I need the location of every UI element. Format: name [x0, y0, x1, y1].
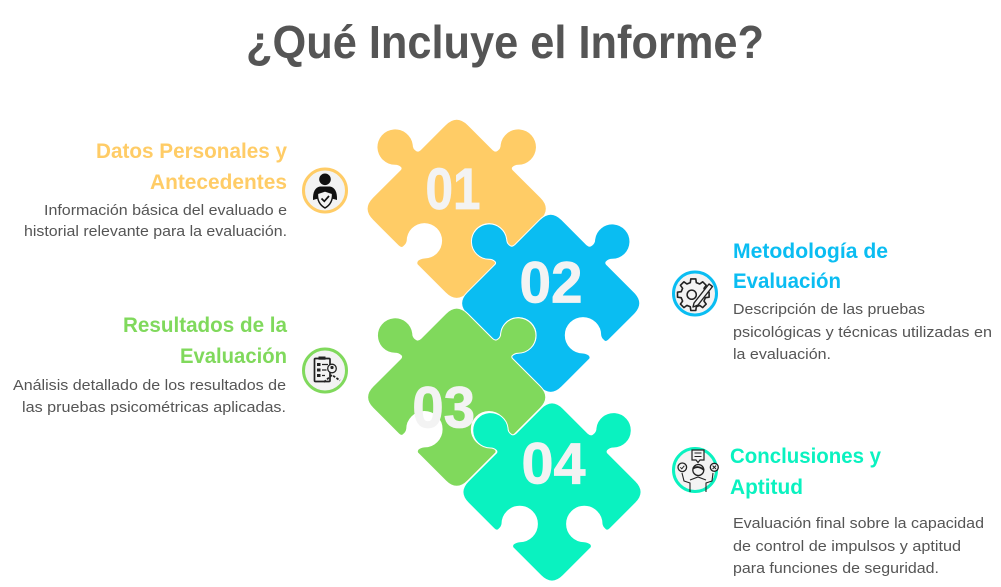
panel: datos personales: [24, 140, 287, 240]
heading: metodología: Metodología de: [733, 240, 888, 263]
heading: metodología: Evaluación: [733, 270, 841, 293]
puzzle piece 04: [463, 403, 641, 581]
panel: metodología: [733, 240, 992, 363]
description: metodología: la evaluación.: [733, 346, 831, 363]
heading: resultados: [123, 314, 287, 368]
icon: person weighing decision: [674, 448, 718, 492]
panel: resultados: [13, 314, 287, 416]
icon: clipboard with results: [304, 349, 346, 392]
heading: datos personales: Antecedentes: [150, 171, 287, 194]
heading: conclusiones: Conclusiones y: [730, 445, 881, 468]
description: resultados: Análisis detallado de los resultados de: [13, 377, 286, 394]
title: ¿Qué Incluye el Informe?: [246, 16, 764, 68]
description: conclusiones: [733, 515, 984, 577]
heading: resultados: Resultados de la: [123, 314, 287, 337]
puzzle piece 02: [462, 214, 640, 392]
heading: conclusiones: Aptitud: [730, 476, 803, 499]
description: datos personales: historial relevante para la evaluación.: [24, 223, 287, 240]
number 04: 04: [522, 431, 586, 496]
description: conclusiones: de control de impulsos y aptitud: [733, 538, 961, 555]
number 01: 01: [426, 157, 480, 222]
description: datos personales: Información básica del evaluado e: [44, 202, 287, 219]
description: conclusiones: Evaluación final sobre la capacidad: [733, 515, 984, 532]
number 03: 03: [412, 376, 475, 441]
panel: conclusiones: [730, 445, 984, 577]
description: datos personales: [24, 202, 287, 240]
description: resultados: [13, 377, 286, 416]
puzzle piece 01: [368, 120, 546, 298]
heading: datos personales: Datos Personales y: [96, 140, 287, 163]
number 02: 02: [520, 251, 582, 316]
description: metodología: psicológicas y técnicas utilizadas en: [733, 324, 992, 341]
description: metodología: [733, 301, 992, 363]
description: metodología: Descripción de las pruebas: [733, 301, 925, 318]
puzzle piece 03: [368, 308, 546, 486]
heading: conclusiones: [730, 445, 881, 499]
description: conclusiones: para funciones de seguridad.: [733, 560, 939, 577]
description: resultados: las pruebas psicométricas aplicadas.: [22, 399, 286, 416]
heading: datos personales: [96, 140, 287, 194]
heading: metodología: [733, 240, 888, 293]
heading: resultados: Evaluación: [180, 345, 287, 368]
icon: gear with pencil: [674, 272, 716, 315]
icon: person holding shield: [304, 169, 346, 212]
